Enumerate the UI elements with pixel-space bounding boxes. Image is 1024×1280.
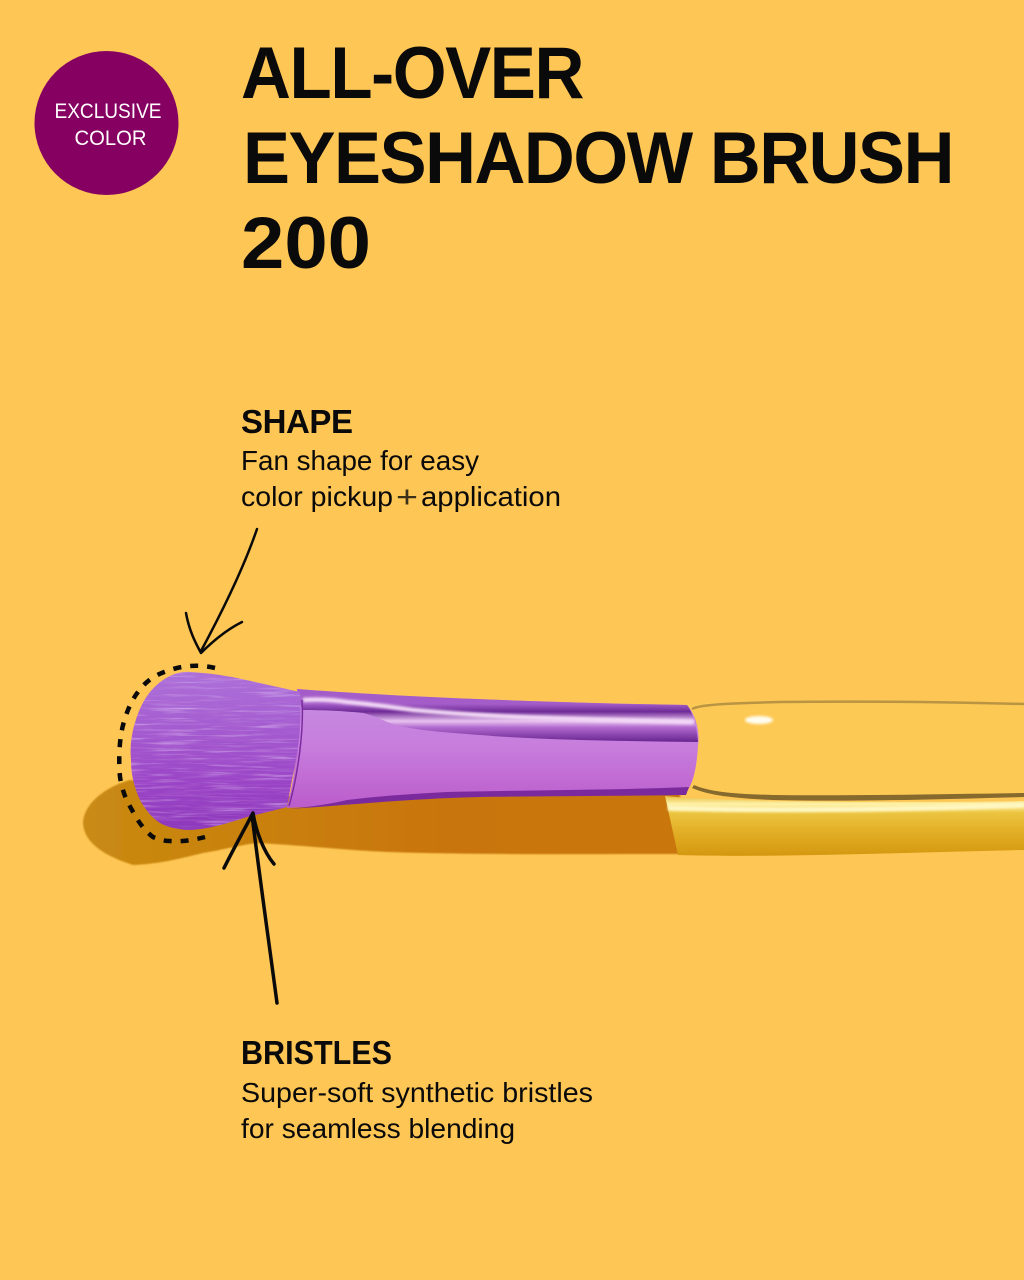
brush ferrule (287, 689, 699, 809)
badge: exclusive color (34, 51, 178, 195)
brush shadow (83, 780, 680, 865)
text block: shape: + (396, 479, 418, 514)
brush bristles (130, 672, 300, 830)
dashed outline around brush tip (119, 666, 215, 841)
title: EYESHADOW BRUSH (243, 118, 953, 199)
text block: bristles: BRISTLES (241, 1034, 392, 1071)
text block: shape: Fan shape for easy (241, 445, 479, 476)
title: 200 (241, 203, 371, 284)
title (241, 33, 953, 284)
text block: bristles: Super-soft synthetic bristles (241, 1077, 593, 1108)
text block: shape: color pickup (241, 481, 393, 512)
brush illustration (125, 665, 1024, 856)
arrow: bristles to brush base (224, 813, 277, 1003)
text block: bristles (241, 1034, 593, 1144)
text block: bristles: for seamless blending (241, 1113, 515, 1144)
text block: shape: application (421, 481, 561, 512)
badge: exclusive color: EXCLUSIVE (54, 100, 162, 123)
text block: shape (241, 403, 561, 514)
text block: shape: SHAPE (241, 403, 353, 440)
arrow: shape to brush tip (186, 529, 257, 653)
title: ALL-OVER (241, 33, 584, 114)
brush handle (665, 701, 1024, 856)
badge: exclusive color: COLOR (74, 127, 146, 150)
